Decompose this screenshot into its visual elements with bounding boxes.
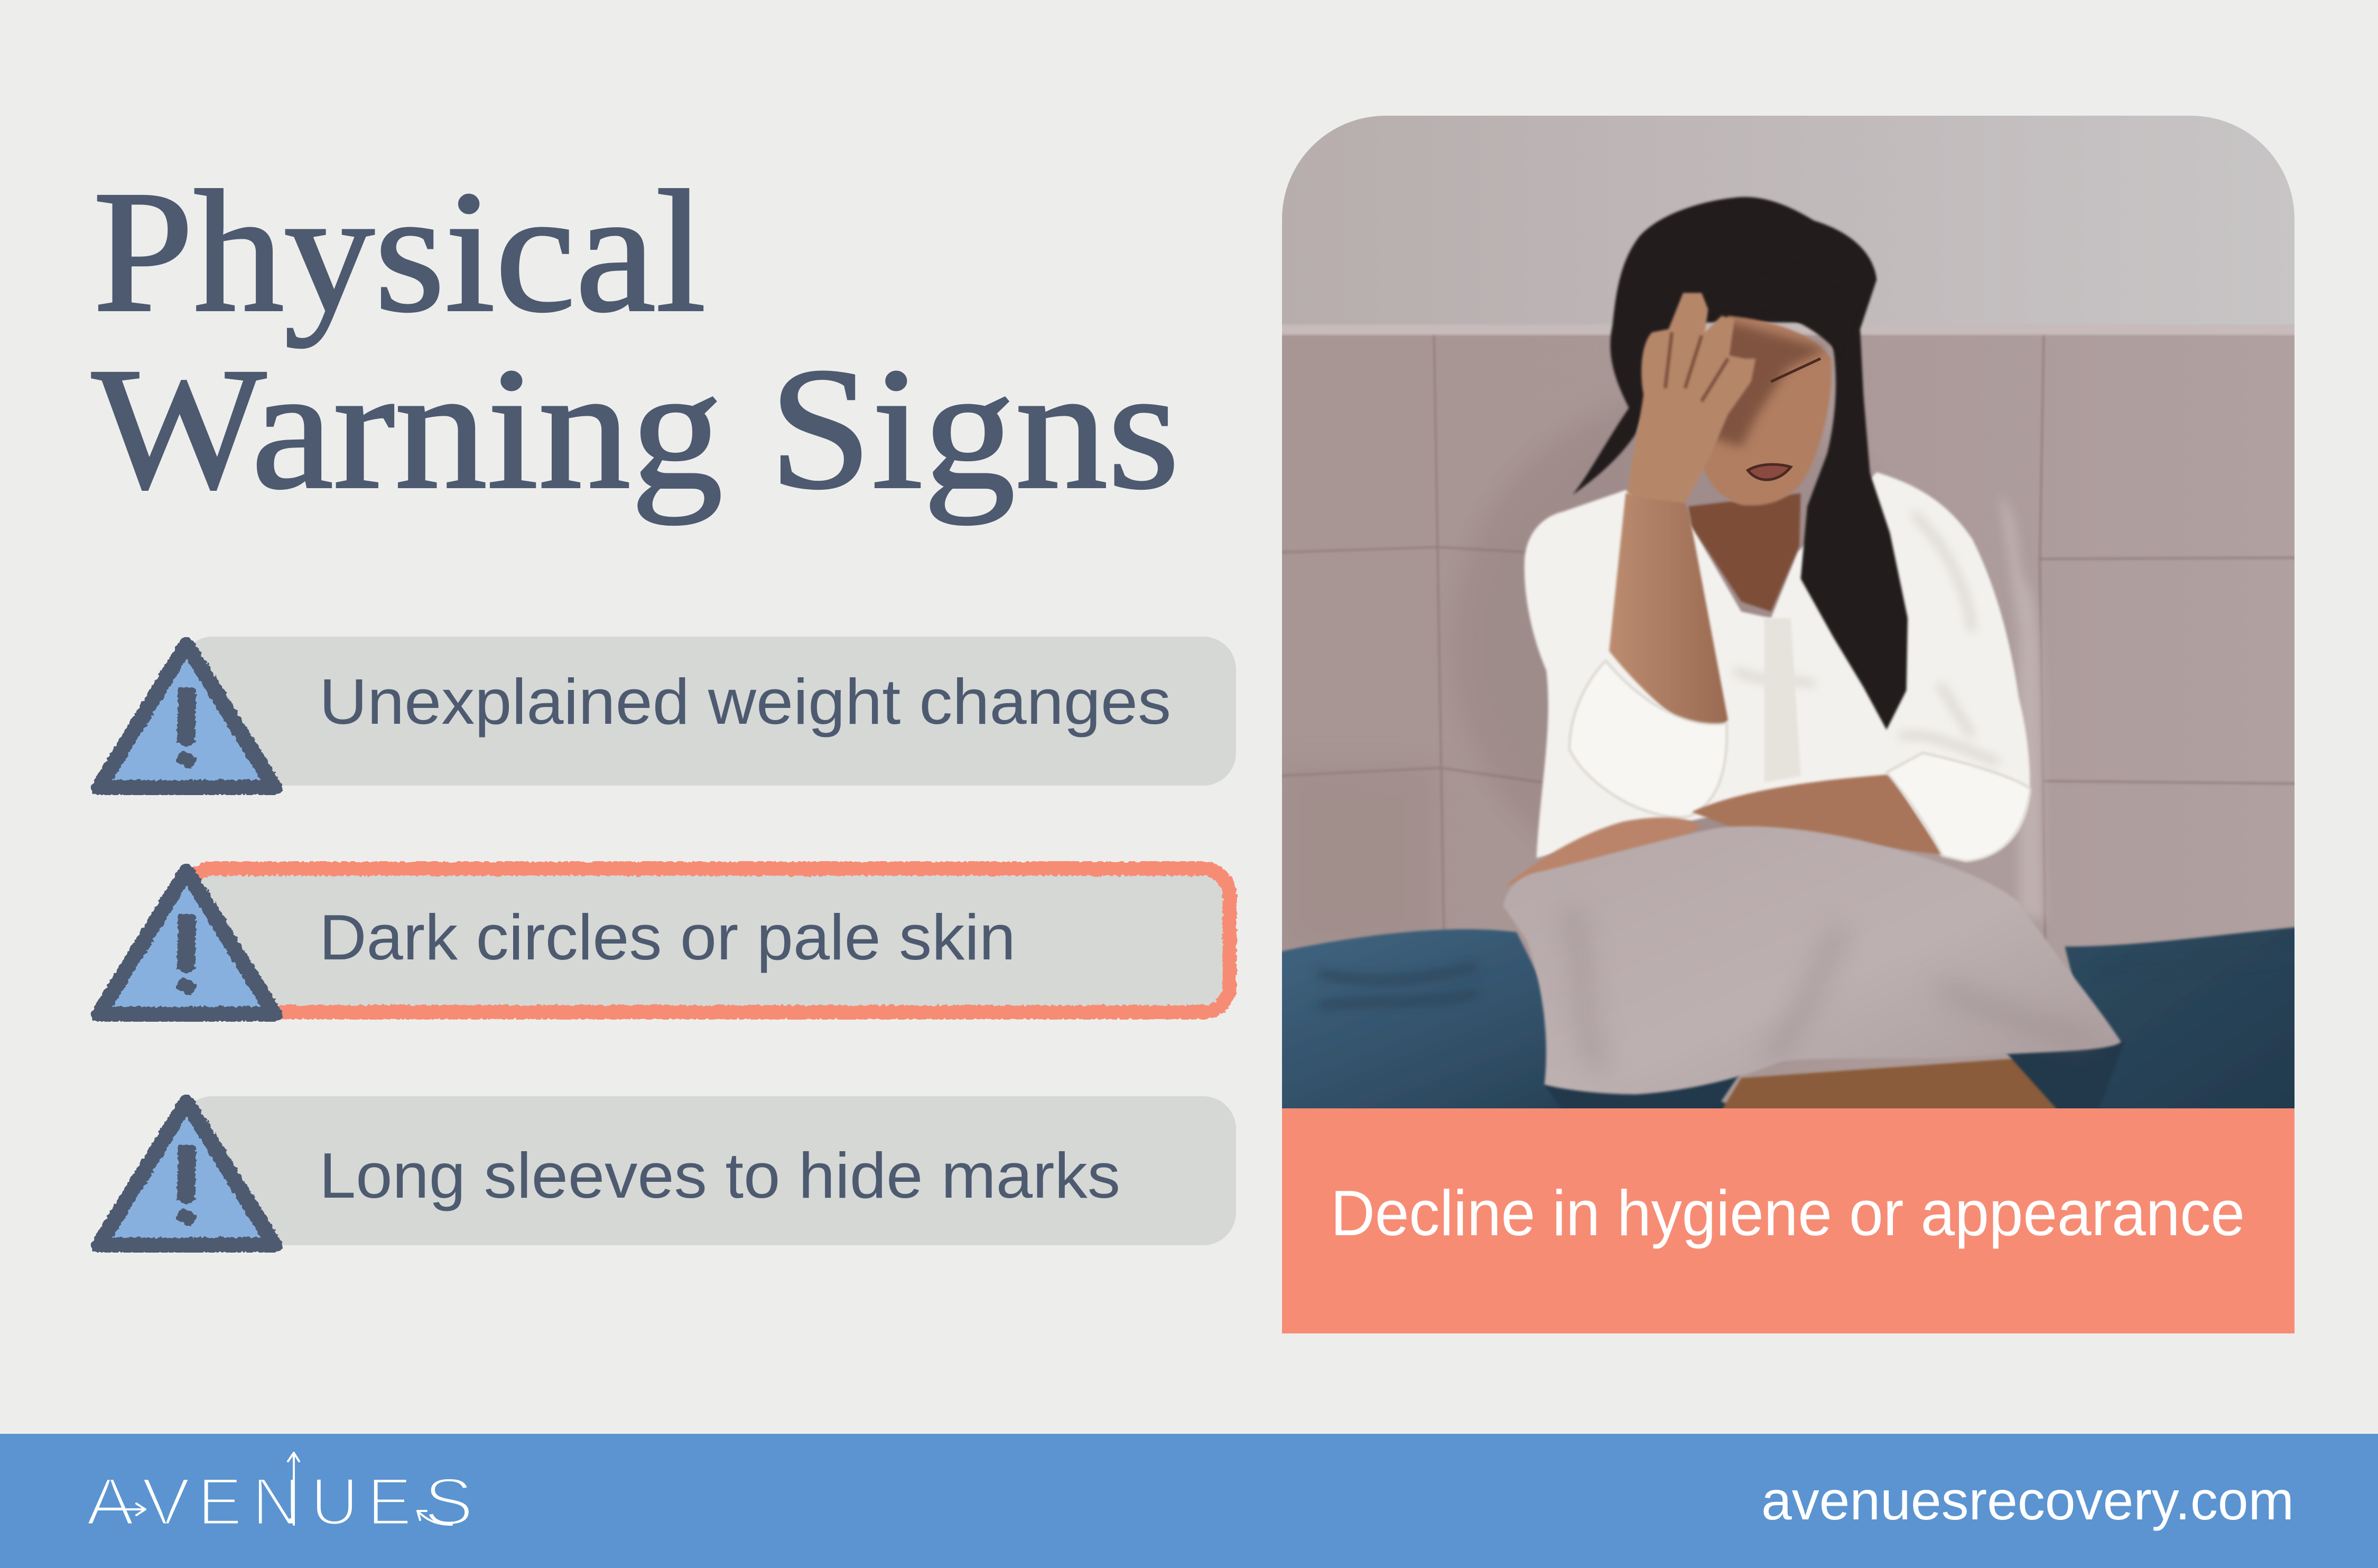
- dark jeans under pillow: [1544, 1042, 2124, 1111]
- logo: AVENUES: U: [311, 1464, 358, 1539]
- text: dark circles: Dark circles or pale skin: [319, 901, 1016, 973]
- website: avenuesrecovery.com: [1761, 1470, 2294, 1532]
- sleeve cuff folded arm: [1887, 753, 2030, 861]
- folded forearm: [1692, 774, 1943, 855]
- logo: AVENUES: E: [367, 1464, 412, 1539]
- lower hand: [1505, 817, 1702, 886]
- logo: AVENUES: E: [198, 1464, 242, 1539]
- hand: [1628, 293, 1755, 503]
- caption panel: [1282, 1108, 2295, 1333]
- caption background: [1282, 1108, 2295, 1333]
- jeans folds: [1318, 964, 1475, 1011]
- list item: dark circles: [99, 869, 1230, 1014]
- icon: warning triangle: [99, 645, 275, 788]
- seat between legs: [1721, 1058, 2058, 1108]
- logo: AVENUES: [86, 1453, 473, 1539]
- shirt placket: [1764, 618, 1801, 782]
- logo: AVENUES: S: [424, 1464, 473, 1539]
- jeans left: [1279, 929, 1741, 1111]
- shirt: [1525, 472, 2030, 861]
- sofa back: [1279, 324, 2299, 1111]
- photo: distressed woman on sofa: [1279, 106, 2299, 1111]
- eye and mouth: [1748, 359, 1820, 480]
- shirt folds: [1734, 513, 1999, 763]
- hair over brow: [1708, 263, 1860, 356]
- pill: weight changes: [180, 637, 1236, 786]
- pill: dark circles, coral outline: [186, 869, 1230, 1012]
- hair: [1573, 197, 1908, 730]
- pillow: [1503, 826, 2121, 1095]
- text: weight changes: Unexplained weight changes: [319, 666, 1171, 738]
- pill: long sleeves: [180, 1096, 1236, 1245]
- text: long sleeves: Long sleeves to hide marks: [319, 1140, 1120, 1211]
- list item: weight changes: [99, 637, 1236, 788]
- jeans right: [2063, 926, 2295, 1108]
- title: [92, 155, 1179, 525]
- logo: AVENUES: A: [86, 1464, 134, 1539]
- wall: [1279, 106, 2299, 332]
- list item: long sleeves: [99, 1096, 1236, 1245]
- raised arm: [1609, 493, 1728, 740]
- footer band: [0, 1434, 2378, 1568]
- caption text: Decline in hygiene or appearance: [1331, 1177, 2245, 1249]
- neck: [1688, 493, 1801, 612]
- title: Warning Signs: [92, 332, 1179, 525]
- title: Physical: [93, 155, 706, 348]
- footer background: [0, 1434, 2378, 1568]
- pillow creases: [1569, 907, 2092, 1071]
- icon: warning triangle: [99, 871, 275, 1014]
- logo: AVENUES: N: [252, 1464, 301, 1539]
- icon: warning triangle: [99, 1102, 275, 1245]
- face shadow: [1702, 319, 1827, 447]
- logo: AVENUES: V: [142, 1464, 190, 1539]
- sleeve cuff raised arm: [1569, 661, 1727, 817]
- face: [1695, 316, 1832, 506]
- finger gaps: [1665, 332, 1728, 402]
